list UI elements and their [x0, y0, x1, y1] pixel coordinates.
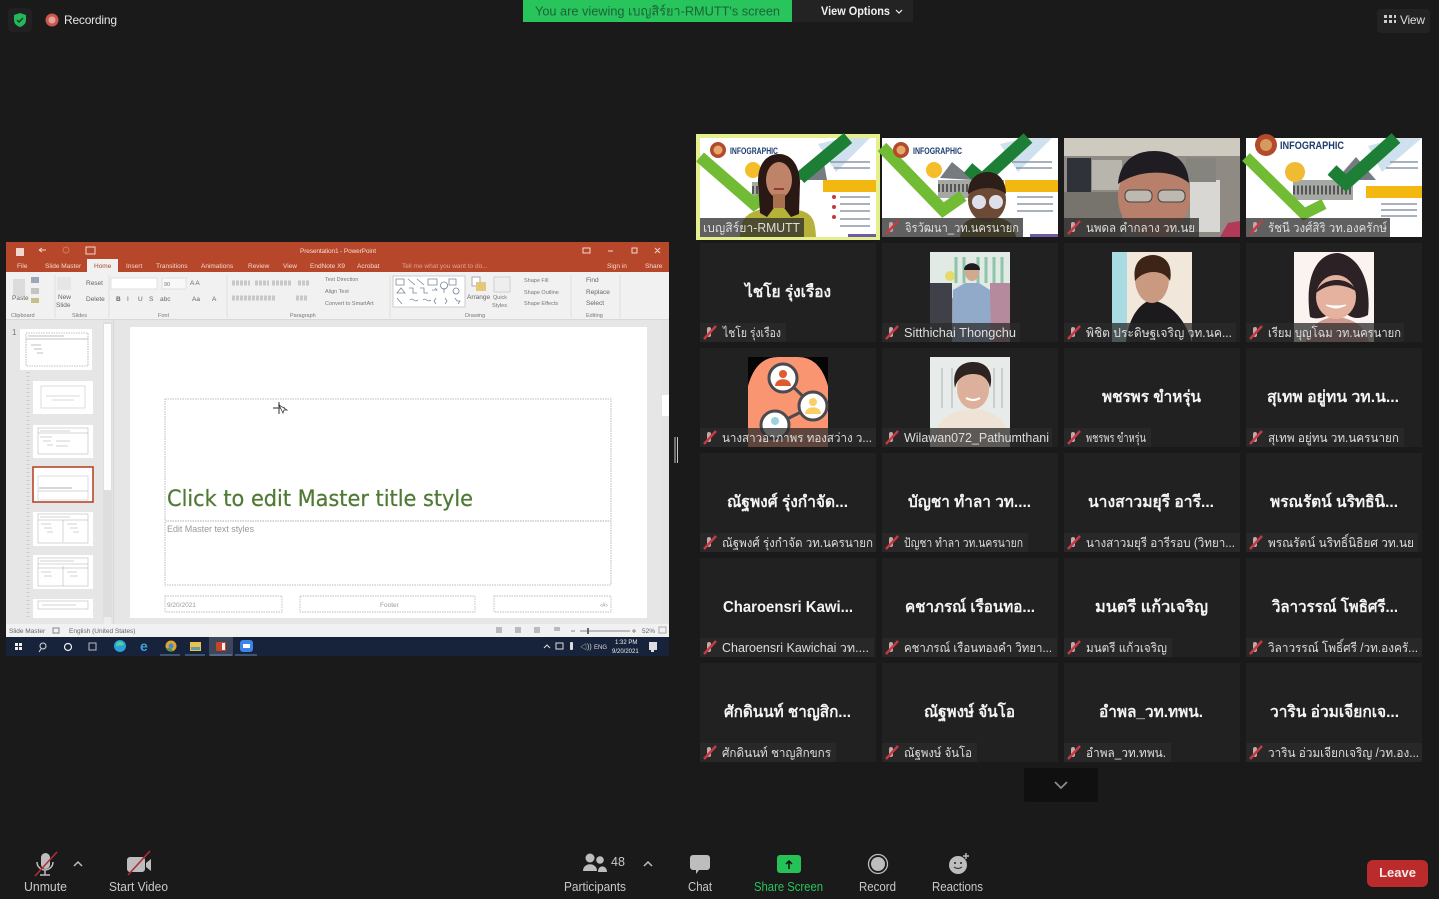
profile photo — [1294, 252, 1374, 342]
recording indicator: Recording — [64, 13, 117, 27]
title placeholder — [165, 399, 611, 521]
ribbon: Font — [158, 313, 169, 319]
ribbon: Shape Fill — [524, 278, 548, 284]
gallery tile: ณัฐพงศ์ รุ่งกำจัด: ณัฐพงศ์ รุ่งกำจัด... — [727, 492, 848, 512]
ribbon: Text Direction — [325, 277, 358, 283]
webinar banner background — [1246, 134, 1422, 216]
speaker portrait — [740, 154, 816, 237]
name label: เบญสิร์ยา-RMUTT — [703, 221, 800, 235]
participants caret — [644, 862, 652, 866]
toolbar: participants: Participants — [564, 880, 626, 894]
name label — [1246, 428, 1404, 447]
name label — [700, 533, 876, 552]
ribbon: Convert to SmartArt — [325, 301, 374, 307]
ribbon: Delete — [86, 296, 105, 303]
gallery tile: ศักดินนท์: ศักดินนท์ ชาญสิก... — [724, 702, 851, 722]
name label: นางสาวมยุรี อารีรอบ (วิทยา... — [1086, 536, 1235, 551]
ribbon: Slide — [56, 302, 71, 309]
toolbar: start video — [109, 851, 168, 894]
Windows taskbar: 9/20/2021 — [612, 649, 639, 655]
name label — [1064, 638, 1172, 657]
name label: Wilawan072_Pathumthani — [904, 431, 1049, 445]
name label: ศักดินนท์ ชาญสิกขกร — [722, 746, 831, 760]
ribbon: U — [138, 296, 143, 303]
name label — [1064, 218, 1199, 237]
gallery tile: ณัฐพงศ์ รุ่งกำจัด — [700, 453, 876, 552]
name label — [700, 638, 874, 657]
name label — [1064, 323, 1236, 342]
gallery tile: สุเทพ — [1246, 348, 1422, 447]
ribbon: Select — [586, 300, 604, 307]
ribbon: Quick — [493, 295, 507, 301]
gallery tile: สุเทพ: สุเทพ อยู่ทน วท.น... — [1267, 389, 1399, 408]
name label — [1246, 323, 1404, 342]
gallery tile: Charoensri: Charoensri Kawi... — [723, 599, 853, 616]
gallery tile: พรณรัตน์ — [1246, 453, 1422, 552]
name label: นพดล คำกลาง วท.นย — [1086, 221, 1195, 235]
audio options caret — [74, 862, 82, 866]
name label — [882, 323, 1020, 342]
gallery tile: บัญชา: บัญชา ทำลา วท.... — [908, 493, 1031, 512]
ribbon: Paste — [12, 295, 29, 302]
ribbon: Replace — [586, 289, 610, 296]
title placeholder: Click to edit Master title style — [167, 487, 473, 512]
status bar: 52% — [642, 628, 655, 635]
PowerPoint title bar and tabs: View — [283, 263, 297, 270]
gallery tile: มนตรี — [1064, 558, 1240, 657]
name label: Charoensri Kawichai วท.... — [722, 641, 869, 655]
toolbar: participants — [564, 854, 626, 894]
ribbon: Align Text — [325, 289, 349, 295]
name label: พรณรัตน์ นริทธิ์นิธิยศ วท.นย — [1268, 533, 1414, 550]
name label: ณัฐพงษ์ จันโอ — [904, 745, 972, 760]
name label — [1246, 638, 1422, 657]
name label — [700, 428, 876, 447]
PowerPoint title bar and tabs: Insert — [126, 263, 142, 270]
toolbar: reactions — [932, 853, 983, 894]
gallery tile: เรียม — [1246, 243, 1422, 342]
ribbon: Shape Effects — [524, 301, 558, 307]
Windows taskbar: e — [140, 638, 148, 654]
ribbon: Reset — [86, 280, 103, 287]
toolbar: unmute: Unmute — [24, 880, 67, 894]
body text placeholder: Edit Master text styles — [167, 524, 254, 534]
gallery tile: พิชิต — [1064, 243, 1240, 342]
toolbar: record: Record — [859, 880, 896, 894]
name label: สุเทพ อยู่ทน วท.นครนายก — [1268, 431, 1399, 446]
name label: มนตรี แก้วเจริญ — [1086, 641, 1167, 655]
ribbon: Styles — [492, 303, 507, 309]
name label — [1246, 743, 1422, 762]
network avatar — [748, 357, 828, 447]
gallery tile: พรณรัตน์: พรณรัตน์ นริทธินิ... — [1270, 492, 1398, 511]
viewing banner — [523, 0, 792, 22]
name label: ไชโย รุ่งเรือง — [722, 325, 781, 341]
PowerPoint title bar and tabs: Tell me what you want to do... — [402, 263, 488, 270]
webinar banner background — [700, 138, 876, 237]
gallery tile: บัญชา — [882, 453, 1058, 552]
ribbon: Find — [586, 277, 599, 284]
footer placeholders: Footer — [380, 602, 400, 609]
name label: พชรพร ขำหรุ่น — [1086, 431, 1146, 446]
gallery tile: active speaker — [696, 134, 880, 240]
gallery tile: รัชนี — [1246, 134, 1422, 237]
gallery tile: ไชโย — [700, 243, 876, 342]
security shield icon — [8, 8, 32, 32]
name label: จิรวัฒนา_วท.นครนายก — [905, 221, 1019, 235]
slide thumbnails panel: 1 — [12, 328, 17, 337]
ribbon: S — [149, 296, 154, 303]
participant face — [1118, 151, 1190, 237]
gallery tile: มยุรี: นางสาวมยุรี อารี... — [1088, 492, 1214, 512]
gallery tile: ไชโย: ไชโย รุ่งเรือง — [743, 281, 831, 302]
gallery tile: วิลาวรรณ์ — [1246, 558, 1422, 657]
viewing banner: You are viewing เบญสิร์ยา-RMUTT's screen — [535, 4, 780, 18]
gallery tile: ณัฐพงษ์ จันโอ: ณัฐพงษ์ จันโอ — [924, 701, 1015, 722]
Windows taskbar: ◁)) — [580, 643, 592, 651]
gallery tile: Wilawan — [882, 348, 1058, 447]
participant face — [960, 172, 1016, 237]
gallery tile: มนตรี: มนตรี แก้วเจริญ — [1095, 597, 1208, 617]
ribbon: Drawing — [465, 313, 485, 319]
name label: รัชนี วงศ์สิริ วท.องครักษ์ — [1268, 221, 1387, 235]
ribbon: Slides — [72, 313, 87, 319]
ribbon: Aa — [192, 296, 200, 303]
name label: วาริน อ่วมเจียกเจริญ /วท.อง... — [1268, 746, 1419, 760]
footer placeholders — [165, 596, 611, 612]
PowerPoint title bar and tabs: Share — [645, 263, 663, 270]
PowerPoint title bar and tabs: Transitions — [156, 263, 188, 270]
ribbon: I — [127, 296, 129, 303]
profile photo — [930, 252, 1010, 342]
ribbon: abc — [160, 296, 171, 303]
gallery tile: อาภาพร — [700, 348, 876, 447]
status bar — [6, 624, 669, 637]
toolbar: unmute — [24, 852, 67, 894]
name label — [882, 428, 1052, 447]
Windows taskbar: 1:32 PM — [615, 640, 637, 646]
gallery tile: Sitthichai — [882, 243, 1058, 342]
gallery tile: มยุรี — [1064, 453, 1240, 552]
gallery tile: คชาภรณ์: คชาภรณ์ เรือนทอ... — [905, 597, 1035, 616]
PowerPoint title bar and tabs: Presentation1 - PowerPoint — [300, 248, 376, 255]
webinar banner background: INFOGRAPHIC — [913, 146, 962, 156]
toolbar: participants: 48 — [611, 855, 625, 869]
name label — [882, 533, 1028, 552]
leave button: Leave — [1379, 865, 1416, 880]
slide canvas — [114, 320, 669, 624]
name label — [700, 743, 836, 762]
status bar: English (United States) — [69, 628, 135, 635]
Windows taskbar — [6, 637, 669, 656]
name label — [700, 323, 786, 342]
name label: นางสาวอาภาพร ทองสว่าง ว... — [722, 431, 872, 445]
name label — [1064, 533, 1240, 552]
ribbon: New — [58, 294, 71, 301]
name label: วิลาวรรณ์ โพธิ์ศรี /วท.องครั... — [1268, 638, 1418, 655]
toolbar: share screen: Share Screen — [754, 880, 823, 894]
webinar banner background: INFOGRAPHIC — [730, 146, 778, 156]
body text placeholder — [165, 521, 611, 585]
footer placeholders: 9/20/2021 — [167, 602, 196, 609]
ribbon: 90 — [164, 282, 170, 288]
toolbar: chat: Chat — [688, 880, 712, 894]
gallery tile: วาริน — [1246, 663, 1422, 762]
PowerPoint title bar and tabs — [6, 242, 669, 272]
name label — [1064, 743, 1171, 762]
ribbon: B — [116, 296, 121, 303]
PowerPoint title bar and tabs: Slide Master — [45, 263, 82, 270]
ribbon — [6, 272, 669, 320]
profile photo — [930, 357, 1010, 447]
PowerPoint title bar and tabs: Acrobat — [357, 263, 380, 270]
splitter handle — [675, 437, 678, 463]
gallery tile: ศักดินนท์ — [700, 663, 876, 762]
PowerPoint title bar and tabs: EndNote X9 — [310, 263, 345, 270]
webinar banner background: INFOGRAPHIC — [1280, 140, 1344, 152]
ribbon: Editing — [586, 313, 603, 319]
name label: ปัญชา ทำลา วท.นครนายก — [904, 536, 1023, 550]
ribbon: Paragraph — [290, 313, 316, 319]
status bar: Slide Master — [9, 628, 46, 635]
view options button — [792, 0, 913, 22]
toolbar: chat — [688, 855, 712, 894]
toolbar: reactions: Reactions — [932, 880, 983, 894]
view layout button — [1377, 9, 1430, 33]
Windows taskbar: ENG — [594, 645, 607, 651]
name label — [882, 638, 1057, 657]
name label: ณัฐพงศ์ รุ่งกำจัด วท.นครนายก — [722, 536, 873, 551]
PowerPoint title bar and tabs: Home — [94, 263, 112, 270]
webinar banner background — [882, 138, 1058, 237]
ribbon: Arrange — [467, 294, 491, 301]
profile photo — [1112, 252, 1192, 342]
gallery tile: วาริน: วาริน อ่วมเจียกเจ... — [1270, 702, 1399, 721]
name label — [882, 743, 977, 762]
gallery tile: พชรพร — [1064, 348, 1240, 447]
ribbon: Clipboard — [11, 313, 35, 319]
toolbar: record — [859, 854, 896, 894]
gallery tile: วิลาวรรณ์: วิลาวรรณ์ โพธิศรี... — [1271, 596, 1398, 616]
gallery tile: ณัฐพงษ์ จันโอ — [882, 663, 1058, 762]
view options button: View Options — [821, 4, 890, 18]
ribbon: A — [212, 296, 217, 303]
name label: คชาภรณ์ เรือนทองคำ วิทยา... — [904, 641, 1052, 655]
PowerPoint title bar and tabs: File — [17, 263, 28, 270]
toolbar: share screen — [754, 855, 823, 894]
ribbon: Shape Outline — [524, 290, 559, 296]
name label: อำพล_วท.ทพน. — [1086, 746, 1166, 760]
PowerPoint title bar and tabs: Animations — [201, 263, 234, 270]
PowerPoint title bar and tabs: Review — [248, 263, 270, 270]
gallery tile: อำพล — [1064, 663, 1240, 762]
name label — [1246, 218, 1390, 237]
gallery tile: จิรวัฒนา — [882, 138, 1058, 237]
name label: พิชิต ประดิษฐเจริญ วท.นค... — [1086, 326, 1232, 340]
name label: เรียม บุญโฉม วท.นครนายก — [1268, 325, 1401, 341]
PowerPoint title bar and tabs: Sign in — [607, 263, 627, 270]
name label: Sitthichai Thongchu — [904, 326, 1016, 340]
slide thumbnails panel — [6, 320, 114, 624]
view layout button: View — [1400, 13, 1425, 27]
name label — [1064, 428, 1151, 447]
ribbon: A A — [190, 280, 200, 287]
next page arrow button — [1024, 768, 1098, 802]
gallery tile: นพดล — [1064, 138, 1240, 237]
gallery tile: อำพล: อำพล_วท.ทพน. — [1099, 703, 1203, 721]
name label — [882, 218, 1023, 237]
leave button — [1367, 860, 1428, 887]
move cursor — [273, 402, 287, 414]
gallery tile: พชรพร: พชรพร ขำหรุ่น — [1102, 388, 1201, 407]
shared screen: PowerPoint window — [6, 242, 669, 656]
footer placeholders: ‹#› — [600, 602, 608, 609]
name label — [1246, 533, 1418, 552]
office background — [1064, 138, 1240, 237]
toolbar: start video: Start Video — [109, 880, 168, 894]
gallery tile: Charoensri — [700, 558, 876, 657]
gallery tile: คชาภรณ์ — [882, 558, 1058, 657]
